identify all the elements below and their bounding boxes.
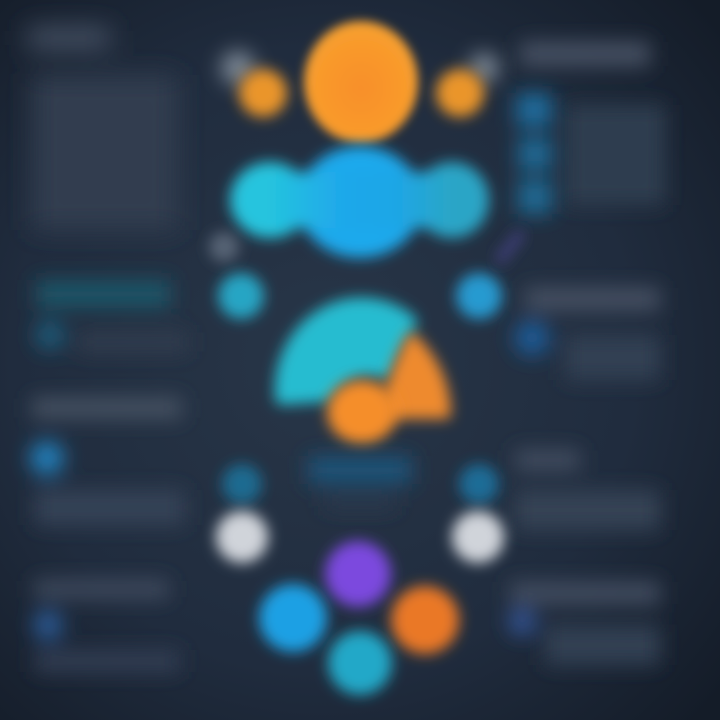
teal node bbox=[328, 631, 392, 695]
panel: left top text block bbox=[28, 28, 178, 230]
icon: left grey node bbox=[221, 51, 255, 85]
panel: right third block bbox=[515, 450, 660, 530]
icon: left orange node bbox=[239, 69, 287, 117]
orange blob bbox=[327, 380, 397, 444]
panel: right bottom block bbox=[508, 582, 660, 665]
orange arc bbox=[385, 338, 446, 414]
icon: top orange circle with side nodes bbox=[221, 21, 499, 143]
icon: right orange node bbox=[436, 69, 484, 117]
icon: node cluster bottom bbox=[259, 541, 459, 695]
icon: faint purple line right bbox=[498, 232, 522, 262]
icon: blue node lower right bbox=[459, 464, 499, 504]
blue node bbox=[259, 584, 327, 652]
panel: left second block bbox=[35, 280, 188, 352]
teal arc bbox=[282, 305, 410, 398]
panel: right top block bbox=[520, 42, 665, 205]
icon: blue cloud bbox=[230, 146, 489, 258]
icon: small grey node left bbox=[209, 232, 239, 262]
purple node bbox=[325, 541, 391, 607]
panel: left bottom block bbox=[33, 580, 180, 672]
icon: right grey node bbox=[469, 53, 499, 83]
icon: small blue node right bbox=[456, 273, 502, 319]
chart: donut gauge bbox=[282, 305, 446, 444]
icon: white node left bbox=[216, 511, 268, 563]
orange node bbox=[391, 586, 459, 654]
icon: main orange circle bbox=[304, 21, 418, 143]
icons: right top column of blue dots bbox=[516, 93, 552, 214]
icon: white node right bbox=[452, 511, 504, 563]
icon: blue node lower left bbox=[222, 464, 262, 504]
icon: small teal node left bbox=[218, 273, 264, 319]
label under chart bbox=[308, 456, 412, 509]
panel: left third block bbox=[30, 398, 185, 525]
panel: right second block bbox=[514, 288, 660, 380]
